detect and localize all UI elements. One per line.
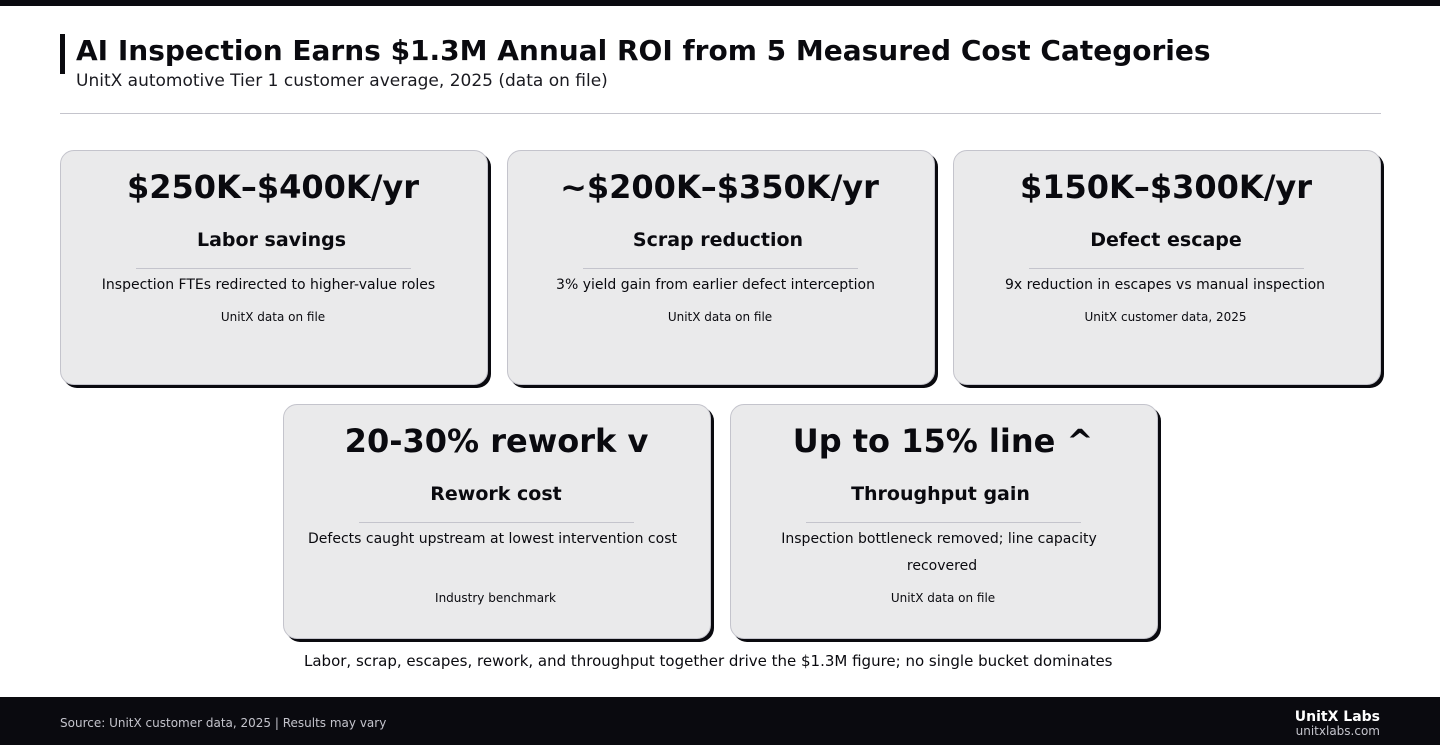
source note: Source: UnitX customer data, 2025 | Results may vary bbox=[60, 716, 386, 730]
panel: scrap reduction bbox=[507, 150, 935, 385]
description: throughput gain bbox=[781, 531, 1097, 574]
panel: rework cost bbox=[283, 404, 711, 639]
title: AI Inspection Earns $1.3M Annual ROI from 5 Measured Cost Categories bbox=[76, 34, 1211, 67]
heading: defect escape: Defect escape bbox=[1090, 229, 1242, 251]
value: defect escape: $150K–$300K/yr bbox=[1020, 168, 1312, 206]
description: labor savings: Inspection FTEs redirected to higher-value roles bbox=[102, 277, 435, 293]
value: labor savings: $250K–$400K/yr bbox=[127, 168, 419, 206]
title accent bar bbox=[60, 34, 65, 74]
takeaway note: Labor, scrap, escapes, rework, and throughput together drive the $1.3M figure; no single bucket dominates bbox=[304, 652, 1112, 670]
panel: throughput gain bbox=[730, 404, 1158, 639]
description: throughput gain: recovered bbox=[907, 558, 977, 574]
value: scrap reduction: ~$200K–$350K/yr bbox=[560, 168, 879, 206]
description: rework cost: Defects caught upstream at lowest intervention cost bbox=[308, 531, 677, 547]
value: rework cost: 20-30% rework v bbox=[345, 422, 648, 460]
source: labor savings: UnitX data on file bbox=[221, 310, 325, 324]
source: scrap reduction: UnitX data on file bbox=[668, 310, 772, 324]
heading: scrap reduction: Scrap reduction bbox=[633, 229, 803, 251]
source: rework cost: Industry benchmark bbox=[435, 591, 556, 605]
heading: rework cost: Rework cost bbox=[430, 483, 562, 505]
panel: labor savings bbox=[60, 150, 488, 385]
description: throughput gain: Inspection bottleneck removed; line capacity bbox=[781, 531, 1097, 547]
heading: throughput gain: Throughput gain bbox=[851, 483, 1030, 505]
value: throughput gain: Up to 15% line ^ bbox=[793, 422, 1093, 460]
footer bbox=[0, 697, 1440, 745]
brand name: UnitX Labs bbox=[1295, 709, 1380, 725]
description: scrap reduction: 3% yield gain from earlier defect interception bbox=[556, 277, 875, 293]
source: throughput gain: UnitX data on file bbox=[891, 591, 995, 605]
brand url: unitxlabs.com bbox=[1296, 724, 1380, 738]
heading: labor savings: Labor savings bbox=[197, 229, 346, 251]
panel: defect escape bbox=[953, 150, 1381, 385]
subtitle: UnitX automotive Tier 1 customer average, 2025 (data on file) bbox=[76, 71, 608, 91]
top bar bbox=[0, 0, 1440, 6]
source: defect escape: UnitX customer data, 2025 bbox=[1085, 310, 1246, 324]
header divider bbox=[60, 113, 1381, 114]
description: defect escape: 9x reduction in escapes vs manual inspection bbox=[1005, 277, 1325, 293]
